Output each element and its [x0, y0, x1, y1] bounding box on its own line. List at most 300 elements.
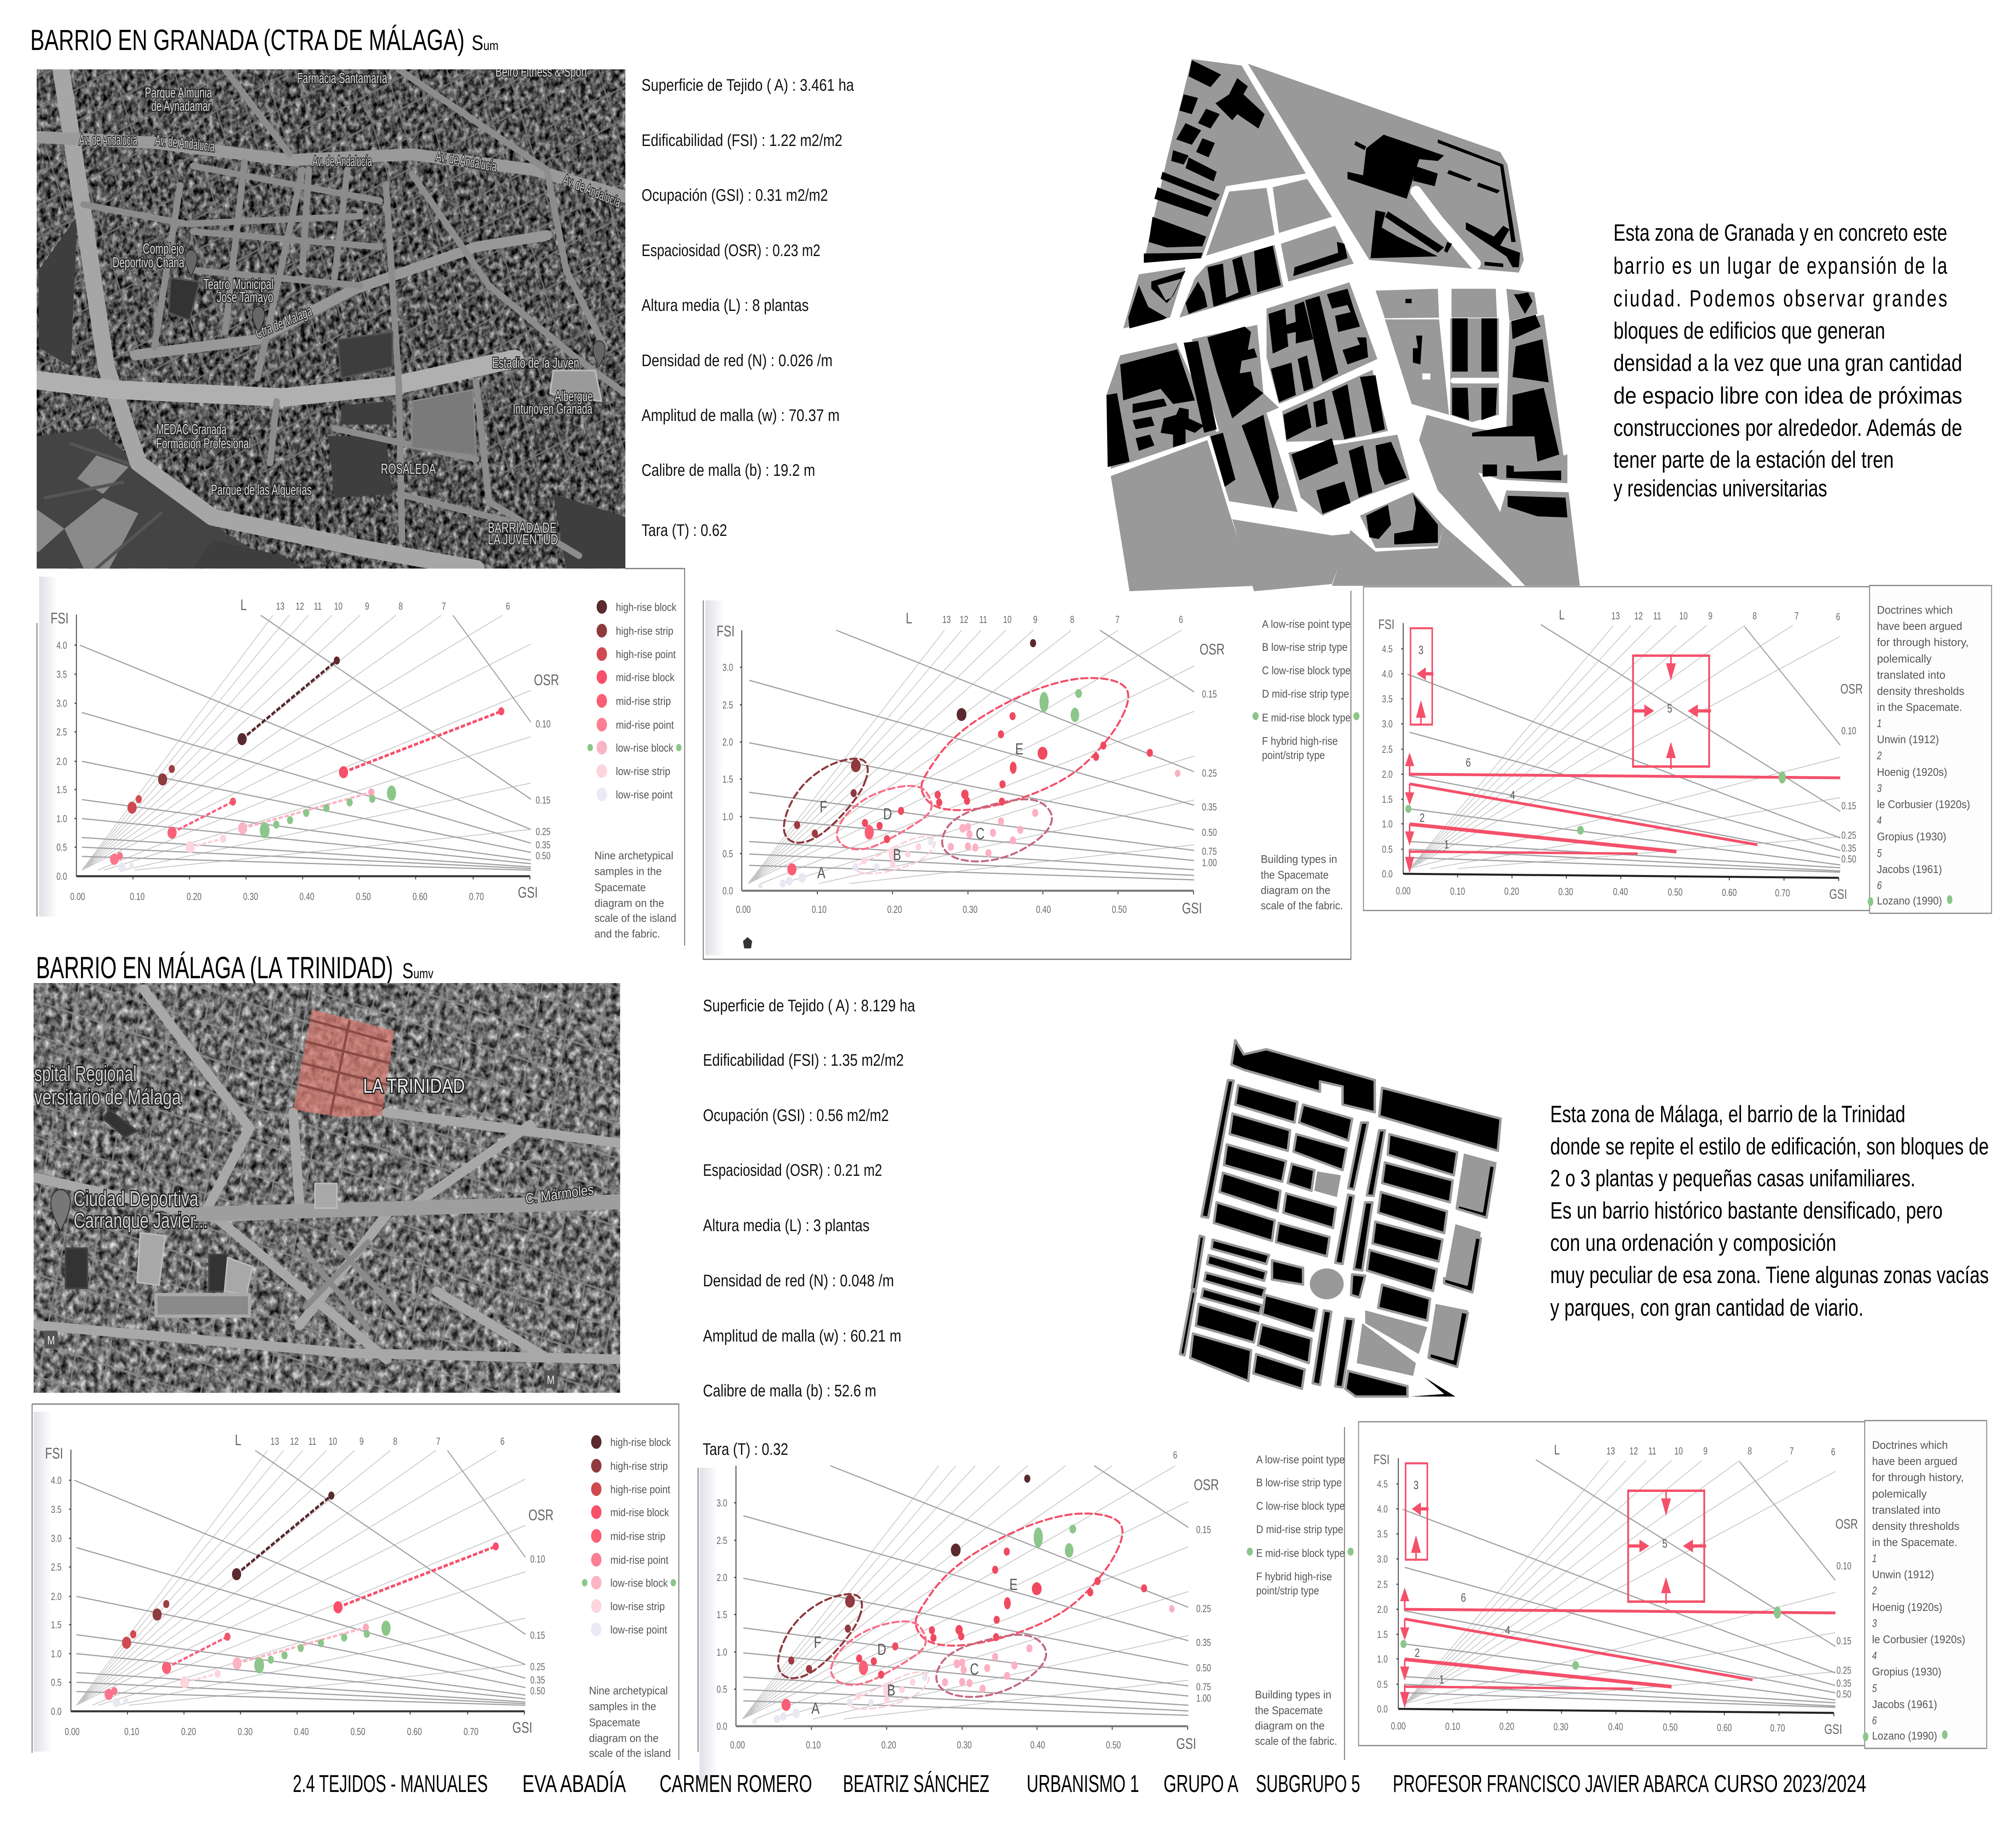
legend: doctrines: 6	[1872, 1715, 1877, 1727]
stats: Málaga: Ocupación (GSI) : 0.56 m2/m2	[703, 1106, 889, 1125]
footer credits	[293, 1771, 1866, 1798]
axis labels: 12	[290, 1435, 299, 1447]
legend: building types: B low-rise strip type	[1256, 1477, 1342, 1489]
legend: building types: E mid-rise block type	[1262, 712, 1351, 724]
axis labels: 0.0	[56, 871, 67, 882]
legend: doctrines: Gropius (1930)	[1877, 831, 1946, 843]
map labels: Málaga: Ciudad Deportiva	[74, 1187, 198, 1211]
map labels: Granada	[79, 63, 622, 548]
map labels: Granada: Beiro Fitness & Sport	[496, 63, 587, 80]
axis labels: 2.0	[1382, 769, 1393, 780]
stats: Málaga: Calibre de malla (b) : 52.6 m	[703, 1381, 876, 1400]
axis labels: 13	[942, 614, 951, 625]
legend: archetypes: low-rise strip	[616, 765, 670, 778]
legend: doctrines: 2	[1872, 1585, 1877, 1597]
axis labels: 3.5	[1377, 1528, 1388, 1540]
axis labels: 10	[329, 1435, 337, 1447]
axis labels: 0.00	[736, 904, 751, 915]
axis labels: 8	[393, 1435, 397, 1447]
title: barrio en Granada: Sum	[472, 31, 498, 54]
axis labels: 12	[1629, 1445, 1638, 1457]
axis labels: 9	[1704, 1445, 1708, 1457]
axis labels: GSI	[1176, 1735, 1196, 1752]
map labels: Málaga: versitario de Málaga	[34, 1085, 181, 1109]
axis labels: 0.70	[464, 1726, 479, 1738]
legend: doctrines	[1868, 604, 1970, 907]
axis labels: 1.5	[1377, 1629, 1388, 1640]
type letters: B	[893, 846, 901, 864]
axis labels: 0.20	[181, 1726, 196, 1738]
legend: archetypes: low-rise strip	[610, 1600, 665, 1613]
axis labels: 0.50	[1106, 1739, 1121, 1751]
axis labels: 2.5	[1382, 744, 1393, 755]
axis labels: 0.15	[1202, 688, 1217, 700]
type letters: A	[811, 1699, 820, 1717]
axis labels: 11	[308, 1435, 317, 1447]
map labels: Granada: BARRIADA DE	[488, 519, 556, 536]
legend: archetypes	[587, 600, 681, 801]
axis labels: 2.0	[1377, 1604, 1388, 1615]
axis labels: 0.50	[1196, 1662, 1211, 1674]
legend: doctrines: have been argued	[1872, 1455, 1957, 1468]
map labels: Granada: Av. de Andalucía	[435, 148, 498, 175]
axis labels: 0.5	[723, 848, 733, 860]
caption	[1255, 1689, 1337, 1748]
axis labels: 0.50	[536, 850, 550, 862]
caption	[1261, 853, 1343, 912]
axis labels: 11	[1648, 1445, 1656, 1457]
legend: doctrines: le Corbusier (1920s)	[1872, 1633, 1965, 1646]
axis labels: 0.5	[1377, 1679, 1388, 1690]
description: Málaga	[1550, 1101, 1989, 1321]
legend: archetypes: low-rise block	[616, 742, 674, 754]
map labels: Granada: Teatro Municipal	[203, 276, 273, 292]
description: Málaga: Esta zona de Málaga, el barrio de la Trinidad	[1550, 1101, 1906, 1127]
description: Málaga: muy peculiar de esa zona. Tiene algunas zonas vacías	[1550, 1262, 1989, 1288]
axis labels: 0.35	[1837, 1677, 1851, 1689]
legend: building types: E mid-rise block type	[1256, 1547, 1345, 1560]
data points	[752, 1475, 1175, 1724]
axis labels: 0.0	[1377, 1703, 1388, 1715]
stats: Granada: Densidad de red (N) : 0.026 /m	[641, 351, 833, 370]
type letters: F	[820, 798, 827, 816]
figure-ground plan: Granada	[1106, 59, 1580, 591]
doctrine numbers: 6	[1461, 1591, 1466, 1604]
axis labels: 0.5	[716, 1683, 727, 1695]
legend: doctrines: 1	[1872, 1552, 1877, 1565]
axis labels: 6	[1831, 1446, 1835, 1458]
icon: map pin	[51, 1190, 70, 1231]
caption: the Spacemate	[1261, 869, 1329, 881]
axis labels: 1.0	[723, 811, 733, 823]
stats: Granada: Edificabilidad (FSI) : 1.22 m2/m2	[641, 131, 842, 150]
axis labels: GSI	[512, 1719, 532, 1736]
icons: metro badges: M	[547, 1373, 554, 1387]
caption: scale of the fabric.	[1255, 1735, 1337, 1748]
type letters: C	[970, 1660, 979, 1678]
doctrine numbers: 6	[1466, 756, 1471, 769]
doctrine numbers: 3	[1414, 1478, 1418, 1492]
axis labels: 6	[500, 1435, 504, 1447]
axis labels: GSI	[1829, 887, 1847, 902]
axis labels	[45, 1431, 554, 1738]
legend: doctrines: 6	[1877, 879, 1882, 892]
legend: doctrines: density thresholds	[1872, 1520, 1960, 1533]
axis labels: 0.20	[887, 904, 902, 915]
axis labels: 0.70	[1775, 887, 1790, 899]
axis labels: 0.35	[536, 839, 550, 851]
legend: archetypes: low-rise block	[610, 1577, 668, 1590]
icons: metro badges	[44, 1331, 558, 1388]
description: Málaga: donde se repite el estilo de edificación, son bloques de	[1550, 1133, 1989, 1159]
caption	[594, 850, 677, 940]
legend: building types	[1247, 1454, 1354, 1597]
panel: building types spacemate (Málaga)	[698, 1427, 1354, 1786]
axis labels: 1.5	[51, 1619, 62, 1631]
axis labels: 0.30	[963, 904, 977, 915]
legend: doctrines: Doctrines which	[1872, 1439, 1948, 1452]
caption: Nine archetypical	[594, 850, 673, 862]
caption: Spacemate	[594, 881, 646, 894]
axis labels: 0.25	[1841, 829, 1856, 841]
axis labels: 2.0	[723, 736, 733, 748]
caption: scale of the island	[589, 1747, 671, 1760]
panel: spacemate samples (Málaga)	[32, 1404, 679, 1760]
caption: scale of the island	[594, 912, 677, 925]
title: barrio en Málaga: BARRIO EN MÁLAGA (LA TRINIDAD)	[36, 951, 393, 985]
map labels: Granada: Parque Almunia	[145, 84, 212, 101]
axis labels: 8	[1747, 1445, 1752, 1457]
legend: doctrines: translated into	[1877, 669, 1945, 681]
map labels: Granada: Deportivo Chana	[112, 254, 184, 271]
axis labels: 2.5	[716, 1535, 727, 1546]
legend: archetypes	[582, 1435, 676, 1636]
caption: and the fabric.	[594, 928, 660, 940]
doctrine numbers: 4	[1505, 1623, 1510, 1637]
map labels: Granada: LA JUVENTUD	[488, 531, 558, 548]
axis labels	[716, 610, 1225, 917]
title: barrio en Granada: BARRIO EN GRANADA (CTRA DE MÁLAGA)	[30, 24, 464, 56]
caption: diagram on the	[1261, 884, 1331, 897]
axis labels: 3.0	[56, 698, 67, 709]
map labels: Granada: ROSALEDA	[381, 460, 436, 477]
axis labels: 0.50	[1663, 1721, 1678, 1733]
axis labels: 6	[1173, 1449, 1177, 1461]
axis labels: 0.25	[536, 826, 550, 838]
axis labels: 0.60	[1717, 1722, 1732, 1733]
axis labels: 2.5	[1377, 1579, 1388, 1590]
axis labels: 0.40	[1030, 1739, 1045, 1751]
doctrine numbers: 4	[1510, 788, 1515, 802]
axis labels: 13	[271, 1435, 279, 1447]
legend: archetypes: high-rise strip	[610, 1460, 668, 1473]
legend: doctrines: polemically	[1877, 653, 1932, 665]
map labels: Granada: Av. de Andalucía	[562, 171, 622, 211]
stat: Tara Málaga: Tara (T) : 0.32	[703, 1440, 788, 1458]
icons: map pins	[185, 250, 605, 367]
legend: doctrines: Jacobs (1961)	[1872, 1698, 1937, 1711]
legend: doctrines: for through history,	[1877, 636, 1969, 649]
axis labels: 2.5	[723, 699, 733, 711]
footer credits: SUBGRUPO 5	[1256, 1771, 1360, 1798]
caption: diagram on the	[594, 897, 664, 910]
data points	[110, 656, 504, 872]
axis labels: 0.0	[51, 1706, 62, 1717]
axis labels: 1.0	[51, 1648, 62, 1660]
axis labels	[50, 596, 559, 902]
description: Málaga: Es un barrio histórico bastante densificado, pero	[1550, 1197, 1943, 1223]
legend: building types: F hybrid high-rise	[1262, 735, 1338, 748]
caption: samples in the	[594, 865, 662, 878]
axis labels: 0.15	[530, 1629, 545, 1641]
description: Granada: densidad a la vez que una gran cantidad	[1614, 350, 1962, 376]
axis labels: 0.00	[1391, 1720, 1406, 1732]
axis labels: 0.40	[294, 1726, 309, 1738]
caption: diagram on the	[1255, 1720, 1325, 1732]
type letters	[817, 740, 1023, 882]
description: Granada: y residencias universitarias	[1614, 475, 1827, 501]
axis labels: 0.60	[1722, 887, 1737, 898]
legend: doctrines: 5	[1877, 847, 1882, 860]
legend: doctrines: 3	[1877, 782, 1882, 795]
footer credits: 2.4 TEJIDOS - MANUALES	[293, 1771, 488, 1798]
axis labels: 13	[1606, 1445, 1615, 1457]
doctrine numbers: 1	[1444, 838, 1449, 851]
axis labels: 0.40	[1608, 1721, 1623, 1733]
axis labels: 4.0	[56, 640, 67, 651]
doctrine numbers: 5	[1667, 702, 1672, 715]
description: Granada: de espacio libre con idea de próximas	[1614, 382, 1962, 408]
data points	[104, 1492, 499, 1707]
axis labels: 1.0	[1377, 1653, 1388, 1665]
axis labels: OSR	[1835, 1517, 1858, 1532]
doctrine numbers: 5	[1662, 1537, 1667, 1550]
legend: archetypes: mid-rise strip	[616, 695, 671, 708]
legend: doctrines: le Corbusier (1920s)	[1877, 798, 1970, 811]
stats: Málaga: Amplitud de malla (w) : 60.21 m	[703, 1326, 901, 1345]
legend: doctrines: 4	[1872, 1650, 1877, 1662]
axis labels: 10	[1679, 610, 1688, 622]
stats: Granada: Tara (T) : 0.62	[641, 521, 727, 540]
axis labels: GSI	[1824, 1722, 1842, 1737]
axis labels: 3.0	[1377, 1553, 1388, 1565]
axis labels: 4.0	[51, 1475, 62, 1486]
axis labels: 0.35	[530, 1674, 545, 1686]
description: Granada: construcciones por alrededor. Además de	[1614, 415, 1962, 441]
doctrine numbers: 2	[1420, 811, 1425, 825]
legend: doctrines: in the Spacemate.	[1872, 1536, 1957, 1549]
legend: doctrines: Lozano (1990)	[1877, 895, 1942, 907]
axis labels: 10	[1674, 1445, 1683, 1457]
legend: archetypes: mid-rise block	[616, 671, 675, 684]
axis labels: OSR	[1840, 682, 1863, 697]
legend: archetypes: low-rise point	[616, 789, 673, 801]
axis labels: 0.10	[806, 1739, 821, 1751]
axis labels: 0.10	[536, 718, 550, 730]
axis labels: 0.00	[70, 891, 85, 902]
axis labels: 6	[506, 600, 510, 612]
legend: archetypes: mid-rise point	[610, 1554, 669, 1567]
axis labels: 0.70	[469, 891, 484, 902]
axis labels: 6	[1836, 611, 1840, 623]
axis labels: 7	[1794, 610, 1799, 622]
legend: doctrines: translated into	[1872, 1504, 1941, 1517]
caption: Spacemate	[589, 1717, 640, 1729]
axis labels: 0.15	[1837, 1635, 1851, 1647]
legend: archetypes: high-rise block	[616, 601, 677, 614]
legend: doctrines: density thresholds	[1877, 685, 1964, 698]
axis labels: 0.0	[723, 885, 733, 897]
caption	[589, 1685, 671, 1760]
axis labels: 2.0	[51, 1591, 62, 1602]
legend: doctrines: 1	[1877, 717, 1882, 730]
title: barrio en Málaga: Sumv	[402, 959, 433, 983]
axis labels: 0.50	[1841, 853, 1856, 865]
doctrine numbers	[1418, 643, 1672, 851]
overlay: La Trinidad	[293, 1009, 394, 1117]
stats: Granada: Altura media (L) : 8 plantas	[641, 296, 809, 315]
axis labels: 0.35	[1196, 1637, 1211, 1648]
axis labels: 0.30	[957, 1739, 972, 1751]
footer credits: GRUPO A	[1164, 1771, 1239, 1798]
caption: Building types in	[1255, 1689, 1331, 1701]
axis labels: 9	[1033, 614, 1037, 625]
legend: archetypes: high-rise strip	[616, 625, 673, 638]
map labels: Granada: Complejo	[143, 240, 184, 257]
axis labels: 0.20	[881, 1739, 896, 1751]
axis labels: 12	[960, 614, 968, 625]
axis labels: 0.20	[187, 891, 202, 902]
caption: Building types in	[1261, 853, 1337, 866]
footer credits: CURSO 2023/2024	[1714, 1771, 1866, 1798]
type letters: E	[1010, 1575, 1018, 1594]
axis labels: 4.0	[1377, 1503, 1388, 1515]
icons: metro badges: M	[47, 1333, 55, 1347]
map labels: Granada: Parque de las Alquerías	[211, 481, 312, 498]
axis labels: 0.0	[1382, 868, 1393, 880]
description: Granada: bloques de edificios que generan	[1614, 317, 1885, 344]
stats: Granada: Superficie de Tejido ( A) : 3.461 ha	[641, 75, 854, 94]
axis labels: 0.50	[1112, 904, 1127, 915]
stats: Granada	[641, 75, 854, 540]
doctrine numbers: 2	[1415, 1646, 1420, 1660]
description: Granada: ciudad. Podemos observar grandes	[1614, 285, 1947, 311]
axis labels: 0.30	[1558, 886, 1573, 898]
axis labels: 0.15	[536, 794, 550, 806]
axis labels: 0.20	[1504, 885, 1519, 897]
axis labels: 13	[276, 600, 285, 612]
stats: Málaga: Densidad de red (N) : 0.048 /m	[703, 1271, 894, 1290]
axis labels: 0.5	[51, 1677, 62, 1688]
map labels: Granada: Albergue	[555, 388, 593, 404]
legend: building types: A low-rise point type	[1262, 618, 1351, 631]
axis labels: 0.35	[1202, 801, 1217, 813]
axis labels: 2.0	[716, 1572, 727, 1583]
axis labels: 0.50	[356, 891, 371, 902]
legend: doctrines: 4	[1877, 815, 1882, 827]
axis labels: L	[235, 1431, 242, 1449]
axis labels: 0.25	[1837, 1665, 1851, 1676]
axis labels: 0.30	[243, 891, 258, 902]
axis labels: 12	[1634, 610, 1643, 622]
axis labels: 0.10	[1445, 1721, 1460, 1732]
map labels: Granada: Estadio de la Juven	[492, 354, 579, 371]
legend: doctrines: Jacobs (1961)	[1877, 863, 1942, 876]
map labels: Málaga: C. Mármoles	[525, 1181, 594, 1207]
legend: doctrines: Hoenig (1920s)	[1872, 1601, 1942, 1614]
legend: doctrines: 3	[1872, 1617, 1877, 1630]
axis labels: 0.50	[1837, 1688, 1851, 1700]
axis labels: 8	[1070, 614, 1074, 625]
description: Granada: barrio es un lugar de expansión de la	[1614, 252, 1947, 279]
axis labels: FSI	[50, 610, 69, 627]
legend: archetypes: low-rise point	[610, 1624, 667, 1636]
axis labels: 4.0	[1382, 668, 1393, 680]
map labels: Granada: Ctra de Málaga	[254, 302, 313, 342]
stats: Málaga: Altura media (L) : 3 plantas	[703, 1216, 870, 1235]
map labels: Málaga: Carranque Javier...	[74, 1209, 208, 1233]
map labels: Granada: MEDAC Granada	[156, 421, 227, 438]
caption: samples in the	[589, 1700, 656, 1713]
stats: Málaga: Edificabilidad (FSI) : 1.35 m2/m2	[703, 1050, 904, 1069]
axis labels: 0.5	[1382, 844, 1393, 855]
description: Málaga: 2 o 3 plantas y pequeñas casas unifamiliares.	[1550, 1165, 1916, 1191]
caption: the Spacemate	[1255, 1704, 1323, 1717]
axis labels: L	[906, 610, 912, 627]
map labels: Málaga: spital Regional	[34, 1062, 137, 1086]
type letters: E	[1015, 740, 1023, 758]
axis labels: 0.20	[1500, 1721, 1514, 1732]
legend: doctrines	[1863, 1439, 1965, 1742]
axis labels: 0.10	[812, 904, 827, 915]
axis labels: OSR	[1194, 1476, 1219, 1494]
axis labels: 0.10	[124, 1726, 139, 1738]
doctrine numbers	[1414, 1478, 1667, 1686]
axis labels: 9	[365, 600, 369, 612]
legend: archetypes: mid-rise point	[616, 719, 674, 731]
type letters: D	[883, 805, 892, 823]
legend: building types: F hybrid high-rise	[1256, 1571, 1332, 1583]
axis labels: 1.5	[723, 773, 733, 785]
axis labels: 7	[436, 1435, 440, 1447]
axis labels: 0.75	[1202, 846, 1217, 857]
footer credits: PROFESOR FRANCISCO JAVIER ABARCA	[1393, 1771, 1709, 1798]
legend: building types	[1252, 618, 1360, 762]
axis labels: 2.5	[51, 1561, 62, 1573]
data points	[758, 639, 1181, 889]
description: Granada: tener parte de la estación del tren	[1614, 446, 1894, 473]
legend: archetypes: high-rise point	[610, 1483, 670, 1496]
axis labels: 1.0	[1382, 818, 1393, 830]
description: Granada: Esta zona de Granada y en concreto este	[1614, 219, 1947, 246]
axis labels: L	[1559, 608, 1565, 623]
map labels: Granada: Av. de Andalucía	[79, 131, 137, 148]
stats: Granada: Amplitud de malla (w) : 70.37 m	[641, 406, 839, 425]
legend: doctrines: Unwin (1912)	[1877, 733, 1939, 746]
description: Málaga: y parques, con gran cantidad de viario.	[1550, 1294, 1864, 1321]
axis labels: 6	[1179, 614, 1183, 625]
axis labels: 0.00	[1396, 885, 1411, 897]
axis labels: GSI	[518, 884, 538, 901]
axis labels: 0.50	[1668, 886, 1683, 898]
map labels: Granada: de Aynadamar	[151, 98, 211, 114]
axis labels: 0.60	[412, 891, 427, 902]
axis labels: 0.10	[1837, 1560, 1851, 1572]
stats: Granada: Espaciosidad (OSR) : 0.23 m2	[641, 241, 821, 260]
axis labels: 1.00	[1202, 857, 1217, 869]
axis labels: 1.0	[716, 1646, 727, 1658]
axis labels: 12	[296, 600, 304, 612]
